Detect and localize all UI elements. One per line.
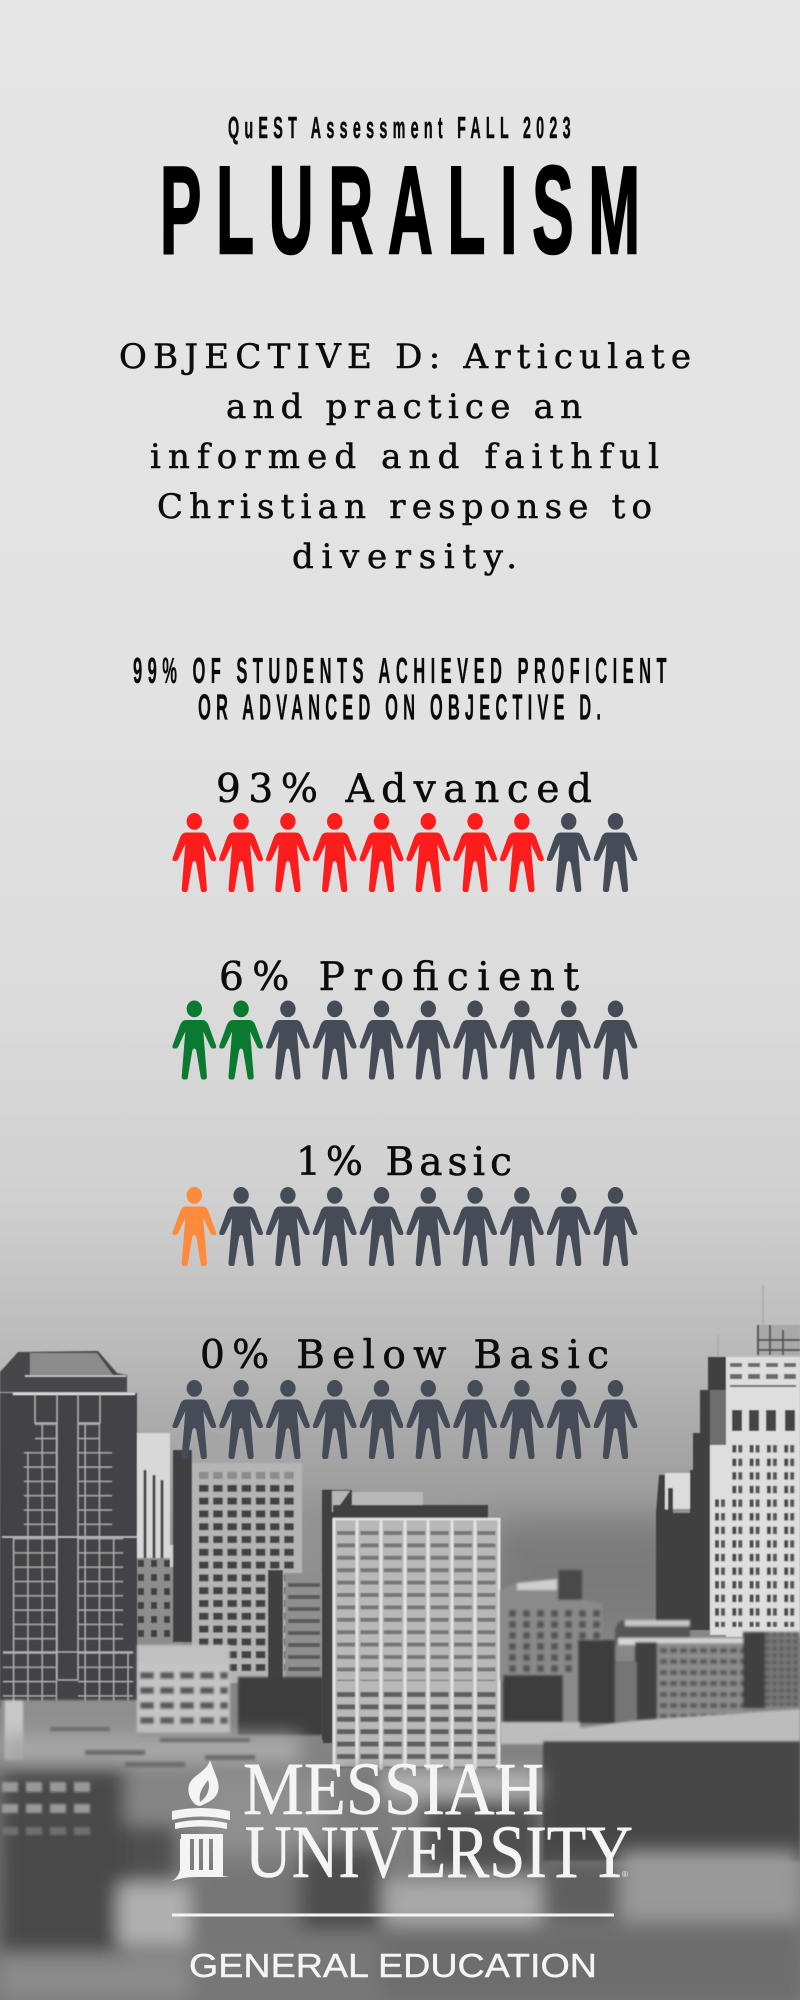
text block: 99% proficient or advanced summary: 99% OF STUDENTS ACHIEVED PROFICIENT: [133, 651, 667, 691]
label: 0% Below Basic: 0% Below Basic: [200, 1333, 609, 1378]
pictogram: 0% below basic, none highlighted: [172, 1380, 637, 1459]
distant hills haze: [300, 1500, 690, 1630]
left art-deco tower: [0, 1351, 138, 1708]
wordmark: UNIVERSITY: UNIVERSITY: [245, 1811, 633, 1894]
text block: 99% proficient or advanced summary: [133, 651, 667, 727]
central tower: [323, 1490, 500, 1770]
text block: 99% proficient or advanced summary: OR ADVANCED ON OBJECTIVE D.: [198, 687, 601, 727]
text block: objective D statement: [119, 337, 691, 577]
heading: assessment subtitle: QuEST Assessment FALL 2023: [228, 111, 571, 146]
text block: objective D statement: and practice an: [226, 387, 582, 427]
middle low buildings: [0, 1645, 323, 1760]
text: GENERAL EDUCATION: GENERAL EDUCATION: [189, 1947, 597, 1984]
pictogram: 1% basic, one orange of ten: [172, 1187, 637, 1266]
background: city skyline photo: [0, 1285, 800, 2000]
logo: Messiah University General Education: [168, 1748, 633, 1984]
text block: objective D statement: Christian response to: [157, 487, 652, 527]
label: 93% Advanced: 93% Advanced: [216, 767, 592, 812]
pictogram: 6% proficient, two green of ten: [172, 1000, 637, 1080]
title: PLURALISM: PLURALISM: [160, 140, 640, 280]
right-centre buildings: [500, 1570, 637, 1723]
divider line: [172, 1914, 614, 1916]
foreground blurred city: [0, 1709, 800, 2000]
text block: objective D statement: diversity.: [292, 537, 517, 577]
right tower: [656, 1285, 800, 1637]
wordmark: MESSIAH: MESSIAH: [243, 1748, 544, 1831]
label: 1% Basic: 1% Basic: [296, 1140, 512, 1185]
text block: objective D statement: OBJECTIVE D: Articulate: [119, 337, 691, 377]
registered mark: ®: [622, 1870, 628, 1879]
middle-left buildings: [137, 1430, 332, 1740]
label: 6% Proficient: 6% Proficient: [219, 955, 579, 1000]
right low buildings: [600, 1620, 800, 1724]
icon: flame and column: [168, 1760, 230, 1883]
text block: objective D statement: informed and faithful: [150, 437, 659, 477]
pictogram: 93% advanced, eight red of ten: [172, 813, 637, 892]
